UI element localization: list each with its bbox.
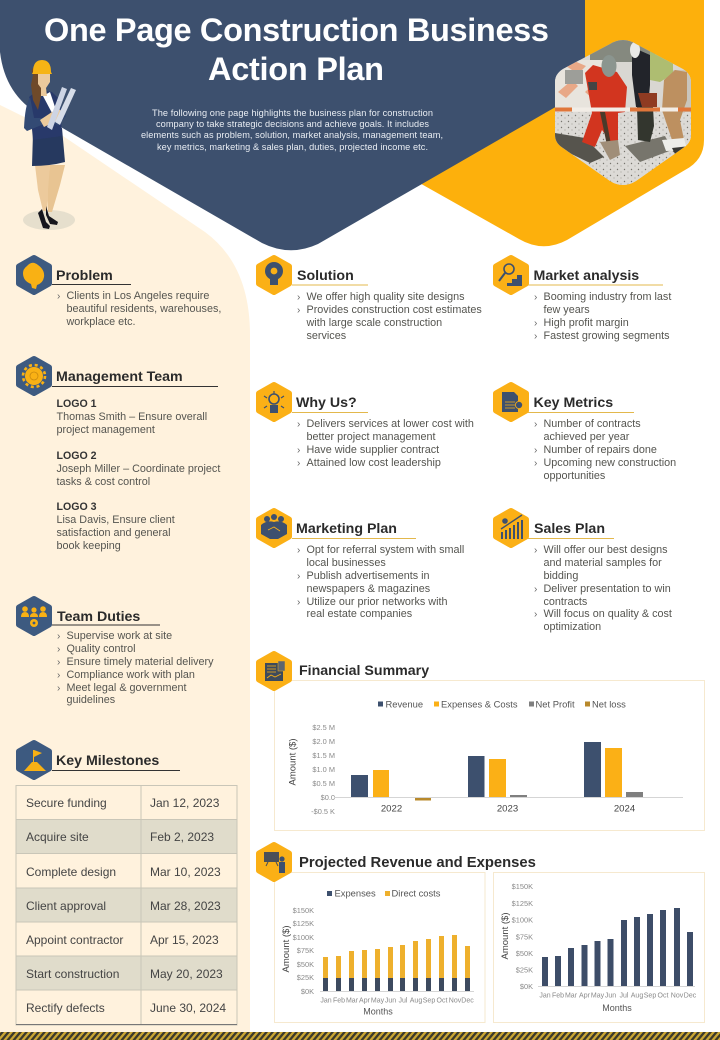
management team text: LOGO 2 (56, 450, 97, 462)
chart: stacked expenses: Amount ($) (281, 926, 292, 972)
chart: stacked expenses: Jul (399, 998, 408, 1004)
legend: Direct costs (392, 888, 441, 898)
management team text: satisfaction and general (56, 527, 171, 539)
chart: stacked expenses: Mar (346, 998, 359, 1004)
chart: financial bar chart: 2024 (614, 804, 636, 814)
key metrics list (534, 418, 676, 482)
icon: report with gear (496, 385, 526, 419)
icon: idea rays (259, 385, 289, 419)
team duties list: Compliance work with plan (66, 669, 195, 681)
icon: financial report (259, 654, 289, 688)
heading: problem: Problem (56, 268, 113, 284)
market analysis list: › (534, 331, 537, 342)
marketing plan list: Opt for referral system with small (306, 544, 464, 556)
key metrics list: › (534, 445, 537, 456)
sales plan list: Will focus on quality & cost (544, 608, 672, 620)
cream sidebar background (0, 105, 250, 1032)
heading: team duties: Team Duties (57, 609, 140, 625)
management team text: Joseph Miller – Coordinate project (56, 463, 220, 475)
chart: financial bar chart: $1.0 M (312, 765, 335, 774)
title: One Page Construction Business (44, 12, 549, 48)
heading: solution: Solution (297, 268, 354, 284)
hazard stripe footer (0, 1032, 720, 1040)
chart: monthly revenue: Jun (605, 992, 616, 1000)
icon: flag on mound (19, 743, 49, 777)
legend: Net loss (592, 698, 626, 710)
chart: monthly revenue: Sep (644, 992, 656, 1000)
chart: monthly revenue: Oct (658, 992, 668, 1000)
milestones table: June 30, 2024 (150, 1001, 226, 1015)
chart: monthly revenue: $150K (512, 882, 533, 891)
header description: key metrics, marketing & sales plan, duties, projected income etc. (157, 142, 428, 152)
management team text: Lisa Davis, Ensure client (56, 514, 175, 526)
market analysis list: High profit margin (544, 317, 629, 329)
chart: financial bar chart: Amount ($) (288, 738, 298, 786)
panel: key metrics (496, 385, 676, 482)
panel: financial summary (259, 654, 704, 830)
problem text (57, 290, 221, 328)
milestones table: Secure funding (26, 796, 107, 810)
chart: monthly revenue (494, 872, 704, 1022)
team duties list (57, 630, 214, 706)
icon: handshake group (259, 511, 289, 545)
header description: The following one page highlights the business plan for construction (152, 108, 433, 118)
problem text: Clients in Los Angeles require (66, 290, 209, 302)
milestones table: Feb 2, 2023 (150, 830, 214, 844)
panel: marketing plan (259, 511, 464, 620)
panel: sales plan (496, 511, 672, 633)
marketing plan list: › (297, 545, 300, 556)
why us list: Delivers services at lower cost with (306, 418, 474, 430)
chart: monthly revenue: Nov (671, 992, 684, 1000)
marketing plan list: real estate companies (306, 608, 413, 620)
chart: stacked expenses: Sep (423, 998, 435, 1004)
why us list: Have wide supplier contract (306, 444, 439, 456)
market analysis list: Booming industry from last (544, 291, 671, 303)
chart: stacked expenses: $75K (297, 946, 314, 955)
why us list: better project management (306, 431, 436, 443)
milestones table: Mar 28, 2023 (150, 899, 221, 913)
management team text: LOGO 3 (56, 501, 97, 513)
team duties list: Meet legal & government (66, 682, 187, 694)
chart: stacked expenses: Months (363, 1006, 393, 1016)
team duties list: Ensure timely material delivery (66, 656, 214, 668)
chart: financial bar chart: $0.5 M (312, 779, 335, 788)
chart: stacked expenses: $0K (301, 987, 314, 996)
chart: stacked expenses: May (371, 998, 385, 1004)
legend: Revenue (386, 698, 423, 710)
milestones table: Appoint contractor (26, 933, 123, 947)
market analysis list: › (534, 318, 537, 329)
heading: why us: Why Us? (296, 395, 357, 411)
key metrics list: Number of repairs done (544, 444, 657, 456)
icon: team with gear (19, 599, 49, 633)
market analysis list (534, 291, 671, 342)
chart: stacked expenses: Oct (437, 998, 447, 1004)
key metrics list: Upcoming new construction (544, 457, 676, 469)
chart: financial bar chart: $2.0 M (312, 737, 335, 746)
chart: stacked expenses (274, 872, 485, 1022)
panel: market analysis (496, 258, 671, 342)
legend: Expenses & Costs (441, 698, 518, 710)
heading: key milestones: Key Milestones (56, 753, 159, 769)
sales plan list: contracts (544, 596, 588, 608)
heading: projected revenue and expenses: Projected Revenue and Expenses (299, 855, 536, 871)
chart: financial bar chart: $1.5 M (312, 751, 335, 760)
milestones table: Jan 12, 2023 (150, 796, 220, 810)
market analysis list: › (534, 292, 537, 303)
solution list (297, 291, 482, 342)
milestones table: Mar 10, 2023 (150, 865, 221, 879)
icon: rising bar chart (496, 511, 526, 545)
key metrics list: › (534, 419, 537, 430)
chart: monthly revenue: Months (602, 1003, 632, 1013)
management team text: Thomas Smith – Ensure overall (56, 411, 207, 423)
chart: monthly revenue: Aug (631, 992, 643, 1000)
chart: financial bar chart: 2023 (497, 804, 518, 814)
marketing plan list: › (297, 571, 300, 582)
marketing plan list: Utilize our prior networks with (306, 596, 448, 608)
team duties list: › (57, 670, 60, 681)
milestones table: Start construction (26, 967, 119, 981)
milestones table (16, 785, 237, 1025)
market analysis list: few years (544, 304, 590, 316)
team duties list: Quality control (66, 643, 136, 655)
problem text: workplace etc. (66, 316, 136, 328)
milestones table: Complete design (26, 865, 116, 879)
chart: stacked expenses: Jan (320, 998, 332, 1004)
marketing plan list (297, 544, 464, 620)
legend: Expenses (334, 888, 376, 898)
milestones table: Apr 15, 2023 (150, 933, 219, 947)
sales plan list: bidding (544, 570, 578, 582)
title (44, 12, 549, 87)
chart: stacked expenses: $50K (297, 960, 314, 969)
photo: workers at construction site (555, 36, 691, 189)
chart: financial bar chart: $0.0 (321, 793, 335, 802)
panel: team duties (19, 599, 214, 706)
navy header shape (0, 0, 585, 250)
chart: stacked expenses: $25K (297, 973, 314, 982)
why us list: › (297, 419, 300, 430)
sales plan list: › (534, 545, 537, 556)
legend: Net Profit (536, 698, 575, 710)
management team text: book keeping (56, 540, 121, 552)
heading: management team: Management Team (56, 369, 183, 385)
problem text: › (57, 291, 60, 302)
team duties list: › (57, 644, 60, 655)
panel: solution (259, 258, 482, 342)
why us list: › (297, 445, 300, 456)
chart: monthly revenue: Jul (620, 992, 629, 1000)
chart: stacked expenses: $125K (293, 919, 314, 928)
milestones table: May 20, 2023 (150, 967, 223, 981)
chart: monthly revenue: Mar (565, 992, 578, 1000)
heading: marketing plan: Marketing Plan (296, 521, 397, 537)
management team text: LOGO 1 (56, 398, 97, 410)
chart: stacked expenses: $150K (293, 906, 314, 915)
chart: monthly revenue: $75K (516, 932, 533, 942)
panel: management team (19, 359, 220, 552)
chart: monthly revenue: $0K (520, 982, 533, 991)
solution list: with large scale construction (306, 317, 442, 329)
icon: presenter at board (259, 845, 289, 879)
solution list: Provides construction cost estimates (306, 304, 482, 316)
team duties list: › (57, 683, 60, 694)
chart: stacked expenses: Apr (359, 998, 371, 1004)
legend (378, 698, 626, 710)
marketing plan list: › (297, 597, 300, 608)
chart: monthly revenue: Amount ($) (500, 912, 511, 960)
problem text: beautiful residents, warehouses, (66, 303, 221, 315)
chart: stacked expenses: Aug (410, 998, 422, 1004)
sales plan list: optimization (544, 621, 601, 633)
header description (141, 108, 443, 152)
icon: head with question (19, 258, 49, 292)
chart: stacked expenses: Nov (449, 998, 462, 1004)
market analysis list: Fastest growing segments (544, 330, 670, 342)
chart: monthly revenue: $50K (516, 949, 533, 958)
sales plan list: › (534, 609, 537, 620)
why us list: Attained low cost leadership (306, 457, 441, 469)
orange header shape (400, 0, 704, 246)
chart: monthly revenue: Apr (579, 992, 591, 1000)
icon: magnifier with bars (496, 258, 526, 292)
key metrics list: achieved per year (544, 431, 630, 443)
chart: stacked expenses: Feb (333, 998, 345, 1004)
key metrics list: › (534, 458, 537, 469)
chart: monthly revenue: May (591, 992, 605, 1000)
milestones table: Acquire site (26, 830, 89, 844)
management team text (56, 398, 220, 552)
chart: monthly revenue: Dec (684, 992, 697, 1000)
header description: elements such as problem, solution, market analysis, management team, (141, 130, 443, 140)
why us list (297, 418, 474, 469)
sales plan list: and material samples for (544, 557, 662, 569)
heading: sales plan: Sales Plan (534, 521, 605, 537)
heading: key metrics: Key Metrics (534, 395, 613, 411)
team duties list: guidelines (66, 694, 116, 706)
key metrics list: opportunities (544, 470, 606, 482)
solution list: › (297, 305, 300, 316)
legend (327, 888, 441, 898)
panel: projected revenue and expenses (259, 845, 704, 1022)
header description: company to take strategic decisions and achieve goals. It includes (156, 119, 429, 129)
management team text: tasks & cost control (56, 476, 150, 488)
marketing plan list: newspapers & magazines (306, 583, 431, 595)
milestones table: Rectify defects (26, 1001, 105, 1015)
heading: financial summary: Financial Summary (299, 663, 429, 679)
sales plan list (534, 544, 672, 633)
icon: bulb with gear (259, 258, 289, 292)
panel: problem (19, 258, 221, 328)
chart: monthly revenue: $100K (512, 916, 533, 924)
chart: financial bar chart: $2.5 M (312, 723, 335, 732)
team duties list: Supervise work at site (66, 630, 172, 642)
solution list: services (306, 330, 347, 342)
panel: key milestones (16, 743, 237, 1025)
chart: monthly revenue: Jan (539, 992, 551, 1000)
chart: financial bar chart: 2022 (381, 804, 402, 814)
chart: monthly revenue: $125K (512, 899, 533, 908)
title: Action Plan (208, 51, 384, 87)
chart: stacked expenses: Jun (385, 998, 396, 1004)
chart: financial bar chart: -$0.5 K (311, 807, 335, 816)
sales plan list: › (534, 584, 537, 595)
sales plan list: Will offer our best designs (544, 544, 668, 556)
chart: financial bar chart (274, 680, 704, 830)
key metrics list: Number of contracts (544, 418, 641, 430)
illustration: construction woman (23, 60, 76, 230)
why us list: › (297, 458, 300, 469)
marketing plan list: Publish advertisements in (306, 570, 430, 582)
panel: why us (259, 385, 474, 469)
icon: gear with person (19, 359, 49, 393)
solution list: We offer high quality site designs (306, 291, 465, 303)
chart: monthly revenue: Feb (552, 992, 564, 1000)
team duties list: › (57, 631, 60, 642)
marketing plan list: local businesses (306, 557, 386, 569)
milestones table: Client approval (26, 899, 106, 913)
chart: stacked expenses: Dec (461, 998, 474, 1004)
heading: market analysis: Market analysis (534, 268, 639, 284)
management team text: project management (56, 424, 155, 436)
solution list: › (297, 292, 300, 303)
sales plan list: Deliver presentation to win (544, 583, 671, 595)
chart: stacked expenses: $100K (293, 933, 314, 942)
team duties list: › (57, 657, 60, 668)
chart: monthly revenue: $25K (516, 966, 533, 974)
